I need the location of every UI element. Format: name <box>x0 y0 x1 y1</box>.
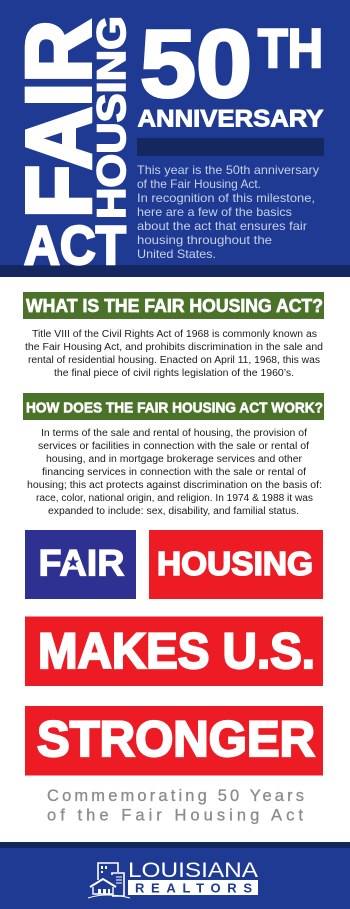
text block: intro: about the act that ensures fair <box>137 219 307 233</box>
text block: intro: This year is the 50th anniversary <box>137 163 319 177</box>
text block: definition <box>25 329 323 379</box>
block: FAIR <box>25 530 136 599</box>
icon: buildings and house <box>88 863 130 898</box>
heading: how does the fair housing act work: HOW DOES THE FAIR HOUSING ACT WORK? <box>26 400 323 416</box>
text block: intro <box>137 163 319 261</box>
text block: intro: United States. <box>137 247 216 261</box>
text block: definition: the Fair Housing Act, and prohibits discrimination in the sale and <box>25 342 323 353</box>
block: FAIR: FAIR <box>38 542 124 584</box>
heading: what is the fair housing act: WHAT IS THE FAIR HOUSING ACT? <box>26 296 323 316</box>
text block: definition: rental of residential housing. Enacted on April 11, 1968, this was <box>28 355 320 366</box>
text block: explanation: financing services in connection with the sale or rental of <box>42 467 306 478</box>
text block: explanation: In terms of the sale and rental of housing, the provision of <box>41 428 307 439</box>
text block: definition: the final piece of civil rights legislation of the 1960’s. <box>54 368 294 379</box>
heading: ANNIVERSARY: ANNIVERSARY <box>138 106 324 132</box>
icon: star <box>67 556 79 568</box>
text block: intro: here are a few of the basics <box>137 205 292 219</box>
panel: header <box>0 0 350 277</box>
wordmark: REALTORS: REALTORS <box>135 880 252 896</box>
text block: intro: In recognition of this milestone, <box>137 191 315 205</box>
wordmark: LOUISIANA: LOUISIANA <box>128 858 259 882</box>
text block: explanation: housing, and in mortgage brokerage services and other <box>46 454 303 465</box>
block: HOUSING: HOUSING <box>157 546 313 583</box>
title: ACT: ACT <box>24 214 126 276</box>
logo: Louisiana Realtors <box>88 858 259 898</box>
text block: commemorating: of the Fair Housing Act <box>47 806 303 824</box>
text block: definition: Title VIII of the Civil Rights Act of 1968 is commonly known as <box>32 329 317 340</box>
text block: explanation <box>27 428 322 517</box>
title: HOUSING: HOUSING <box>90 16 134 219</box>
panel: what is the act <box>23 292 324 379</box>
block: STRONGER: STRONGER <box>37 711 315 767</box>
heading: TH: TH <box>258 17 323 79</box>
text block: intro: housing throughout the <box>137 233 272 247</box>
text block: commemorating: Commemorating 50 Years <box>47 787 304 805</box>
text block: intro: of the Fair Housing Act. <box>137 177 261 191</box>
block: MAKES U.S.: MAKES U.S. <box>38 623 315 679</box>
text block: explanation: services or facilities in connection with the sale or rental of <box>38 441 309 452</box>
block: HOUSING <box>149 530 323 599</box>
panel: how does the act work <box>23 393 324 517</box>
title: FAIR: FAIR <box>8 20 110 218</box>
text block: explanation: housing; this act protects against discrimination on the basis of: <box>27 480 322 491</box>
heading: 50: 50 <box>140 10 252 118</box>
panel: footer <box>0 842 350 909</box>
text block: explanation: race, color, national origin, and religion. In 1974 & 1988 it was <box>36 493 313 504</box>
text block: commemorating <box>47 787 304 824</box>
panel: fair housing slogan <box>25 530 323 776</box>
text block: explanation: expanded to include: sex, disability, and familial status. <box>48 506 299 517</box>
heading: how does the fair housing act work <box>23 393 324 420</box>
decorative dark bar <box>137 138 324 156</box>
